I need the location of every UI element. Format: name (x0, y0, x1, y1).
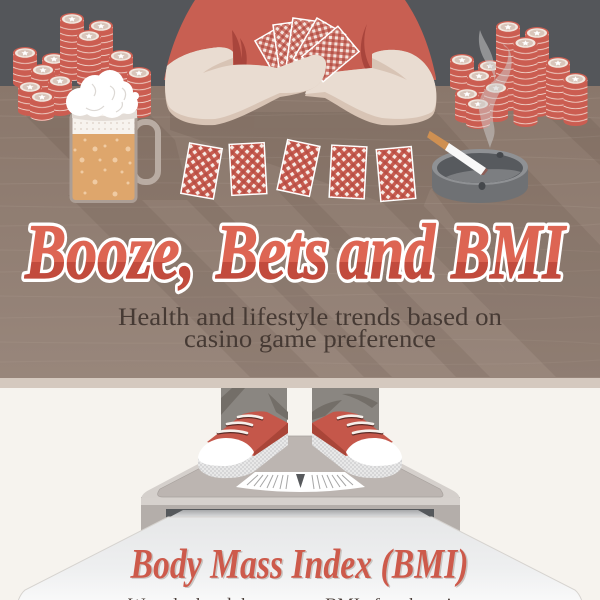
title colour layer: and (339, 208, 436, 295)
wooden table (0, 86, 600, 378)
sole (312, 431, 402, 478)
right sneaker (312, 411, 402, 478)
title colour layer: Booze, (24, 208, 195, 295)
weight dial (236, 472, 365, 492)
title colour layer: BMI (450, 208, 567, 295)
title outline layer: Bets (215, 208, 328, 295)
table card 2 (229, 143, 267, 195)
upper (207, 411, 288, 456)
heading shadow: Body Mass Index (BMI) (131, 543, 470, 589)
person: shirt (164, 0, 436, 80)
scale top (141, 436, 460, 500)
front card (302, 26, 359, 82)
BMI panel (16, 517, 584, 600)
table card 1 (181, 143, 222, 199)
foam band (72, 112, 134, 134)
bathroom scale (141, 436, 460, 535)
printout top (168, 510, 432, 518)
subtitle line 1: Health and lifestyle trends based on (118, 304, 503, 331)
subtitle line 2: casino game preference (184, 326, 436, 353)
table card 4 (329, 145, 367, 199)
slot (166, 509, 434, 518)
right chip stacks (450, 21, 588, 129)
cigarette (428, 132, 488, 175)
lower page background (0, 388, 600, 600)
shirt folds (232, 24, 372, 70)
bubbles (74, 138, 132, 196)
title colour layer: Bets (215, 208, 328, 295)
left arm (165, 47, 326, 125)
left sneaker (198, 411, 288, 478)
fan of cards (255, 18, 346, 82)
heading text: Body Mass Index (BMI) (130, 542, 468, 588)
left chip stacks (13, 13, 151, 121)
laces (218, 416, 262, 434)
table card 5 (376, 147, 416, 201)
legs (221, 388, 379, 432)
scale front (141, 497, 460, 535)
foam head (66, 70, 139, 121)
sole (198, 431, 288, 478)
beer (72, 132, 134, 200)
title outline layer: BMI (450, 208, 567, 295)
dial pointer (296, 474, 305, 488)
beer mug (66, 70, 158, 203)
table front edge (0, 378, 600, 388)
subtitle (118, 304, 503, 353)
table card 3 (277, 140, 320, 196)
right arm (305, 50, 436, 125)
table shadows (25, 112, 600, 377)
mug handle (134, 122, 158, 182)
mug glass (70, 112, 138, 203)
upper (312, 411, 393, 456)
toe cap (198, 438, 254, 466)
laces (338, 416, 382, 434)
smoke (479, 30, 512, 148)
front rim (141, 498, 460, 505)
title (24, 208, 567, 295)
title colour layer (24, 208, 567, 295)
BMI heading (130, 542, 470, 589)
title outline layer: and (339, 208, 436, 295)
title outline layer (24, 208, 567, 295)
title outline layer: Booze, (24, 208, 195, 295)
toe cap (346, 438, 402, 466)
ashtray (432, 149, 528, 203)
background wall (0, 0, 600, 87)
